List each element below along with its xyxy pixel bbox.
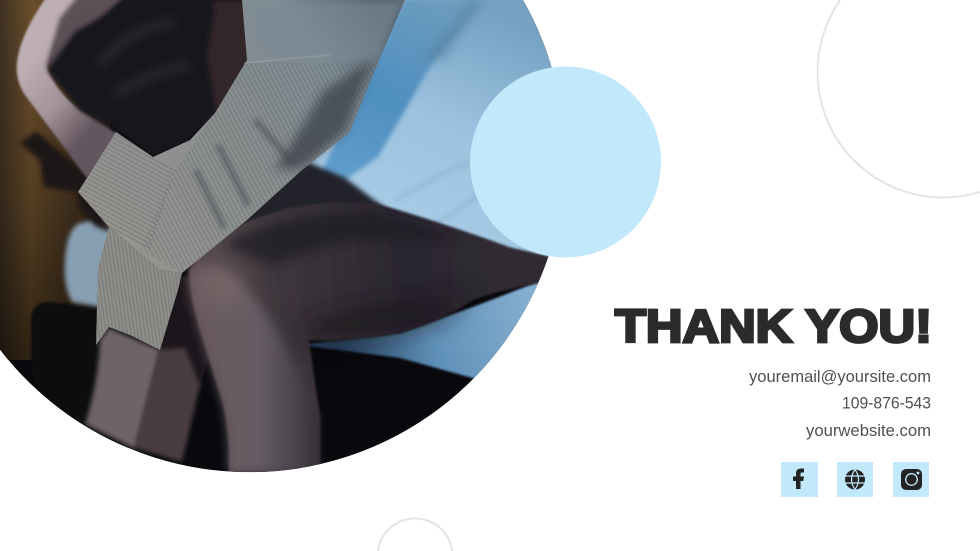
photo: person hugging knees, circular crop bbox=[0, 0, 570, 472]
phone: 109-876-543 bbox=[842, 394, 931, 412]
pale pillow at left bbox=[65, 218, 112, 307]
sweater folds bbox=[196, 120, 290, 228]
bed sheets upper right bbox=[300, 0, 570, 280]
seam bbox=[244, 55, 330, 63]
front leg shading bbox=[189, 266, 318, 472]
hand on head bbox=[46, 0, 128, 70]
thigh and front leg bbox=[189, 203, 552, 472]
icon: globe bbox=[837, 462, 873, 497]
title: THANK YOU! bbox=[615, 300, 932, 352]
website: yourwebsite.com bbox=[806, 422, 931, 440]
neck and shoulder in shadow bbox=[204, 0, 247, 122]
forearm bbox=[85, 328, 160, 449]
contact details bbox=[749, 368, 931, 440]
lit patch on knee bbox=[207, 264, 248, 298]
dark base bbox=[0, 0, 570, 472]
back shin bbox=[135, 348, 200, 462]
shadow under sweater above thigh bbox=[242, 160, 386, 225]
raised arm bbox=[17, 0, 118, 178]
wall background bbox=[0, 0, 110, 360]
lower sleeve bbox=[96, 227, 182, 350]
bed sheet lower right bbox=[300, 280, 545, 380]
icon: facebook bbox=[781, 462, 818, 497]
thigh lower shadow bbox=[300, 295, 470, 340]
shaded right side of sweater bbox=[275, 60, 372, 170]
sofa and floor shadow bbox=[30, 301, 110, 440]
dark upper thigh shadow bbox=[225, 212, 460, 265]
upper shoulder tint bbox=[337, 4, 398, 54]
head of hair bbox=[47, 0, 216, 158]
decorative ring: bottom centre bbox=[378, 518, 452, 551]
hair wisps bbox=[20, 131, 110, 232]
icon: instagram bbox=[893, 462, 929, 497]
email: youremail@yoursite.com bbox=[749, 368, 931, 386]
light blue circle bbox=[470, 66, 661, 258]
gap shadow between legs bbox=[160, 275, 210, 390]
decorative ring: top right bbox=[818, 0, 980, 197]
sweater body bbox=[78, 0, 405, 273]
